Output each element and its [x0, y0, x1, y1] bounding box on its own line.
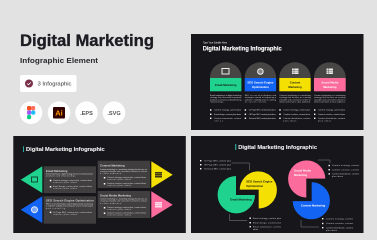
badge: 3 infographic: 3 Infographic — [38, 82, 72, 88]
column: content marketing: valuable and consistent content to — [279, 98, 312, 101]
list: content points: plan ideas — [326, 230, 337, 232]
icon: figma — [20, 101, 42, 124]
column: email marketing: Content strategy, content plan — [214, 109, 241, 112]
list: social points: plan ideas — [332, 176, 343, 178]
card: content marketing: content plan ideas — [107, 178, 131, 181]
icon: adobe illustrator — [48, 101, 70, 124]
list: social points: Content distribution, content — [332, 173, 359, 176]
list: social points: Content strategy, content — [332, 164, 359, 167]
column: social media marketing: attract and retain a clear audience. — [314, 101, 346, 104]
card: social media marketing: content plan ideas — [107, 214, 131, 216]
card: social media marketing — [98, 191, 150, 218]
icon: eps — [75, 101, 98, 124]
list: content points: Content creation, content — [326, 222, 353, 225]
list: email points: Email strategy, content plan — [253, 217, 281, 220]
column: content marketing: Content marketing is a marketing — [279, 94, 311, 97]
card: email marketing — [44, 166, 96, 193]
column: seo: Off Page SEO, content plan ideas — [249, 113, 276, 116]
column: social media marketing: Content marketing is a marketing — [314, 94, 345, 97]
pie: content marketing: Content Marketing — [301, 203, 326, 207]
card: email marketing: Email marketing is a digital strategy that uses email to promote — [46, 172, 94, 175]
list: seo points: Off Page SEO, content plan — [204, 163, 231, 166]
list: email points: Email automation, content — [253, 225, 281, 228]
column: social media marketing: Content creation, content ideas — [318, 113, 345, 116]
icon: eps: .EPS — [80, 111, 93, 117]
column: content marketing: Content creation, content ideas — [283, 113, 310, 116]
list: email points — [230, 214, 281, 231]
arrow: seo — [21, 196, 42, 223]
card: content marketing: a clear audience. — [100, 173, 122, 175]
column: seo: SEO is a set of techniques and — [245, 94, 276, 97]
card: content marketing: Content marketing is a marketing strategy that focuses on — [100, 168, 147, 171]
slide subtitle: Type Your Subtitle Here — [203, 41, 228, 44]
arrow: social media — [151, 191, 173, 218]
column: seo: strategies aimed at improving a — [245, 96, 277, 99]
column: content marketing: plan ideas — [283, 120, 296, 122]
column: email marketing — [210, 62, 242, 122]
list: seo points — [200, 159, 250, 170]
card: seo: a website's visibility and ranking on search results pages — [46, 205, 93, 208]
card: seo: SEO is a set of techniques and strategies aimed at improving — [46, 202, 93, 206]
column: email marketing: relationships. — [210, 101, 224, 104]
title: Digital Marketing — [20, 31, 154, 50]
column: seo: on search results. — [245, 101, 267, 104]
column: email marketing: ideas — [214, 120, 223, 122]
column: email marketing: Content automation, content — [214, 117, 241, 120]
pie: content marketing — [292, 182, 330, 220]
list: email points: ideas — [253, 229, 258, 231]
column: email marketing: Email marketing is a digital marketing — [210, 94, 241, 97]
slide heading: Digital Marketing Infographic — [26, 147, 105, 153]
column: social media marketing: Content distribution, content — [318, 117, 345, 120]
card: email marketing: products and relationships. — [46, 174, 76, 178]
column: social media marketing: Social Media — [321, 80, 339, 84]
card: email marketing: Content strategy, content plan, content ideas — [53, 179, 92, 182]
arrow: email marketing — [21, 166, 42, 193]
pie: social media marketing: Marketing — [294, 173, 308, 177]
card: email marketing: content plan ideas — [53, 181, 77, 184]
pie: seo: Optimization — [246, 184, 264, 188]
column: email marketing: products or services and build strong — [210, 98, 241, 101]
list: social points: Content creation, content — [332, 168, 359, 171]
card: social media marketing: creating valuable and consistent content to attract — [100, 200, 147, 203]
list: social points — [318, 160, 359, 178]
card: social media marketing: Content creation, content plan, content ideas — [107, 212, 146, 214]
column: content marketing: Content distribution, content — [283, 117, 311, 120]
slide heading: Digital Marketing Infographic — [238, 145, 317, 151]
badge: 3 infographic — [20, 75, 76, 92]
column: social media marketing: valuable and consistent content to — [314, 98, 346, 101]
column: email marketing: strategy that uses email to promote — [210, 96, 242, 99]
card: email marketing: Email design, content plan, content ideas — [53, 185, 92, 188]
card: content marketing: Content strategy, content plan, content ideas — [107, 176, 146, 179]
column: seo: Optimization — [252, 85, 269, 89]
list: content points: Content strategy, content — [326, 217, 353, 220]
list: seo points: Technical SEO, content plan — [204, 167, 231, 170]
list: content points — [301, 217, 353, 232]
pie: social media marketing: Social Media — [294, 168, 311, 172]
subtitle: Infographic Element — [20, 56, 99, 65]
column: social media marketing: strategy that focuses on creating — [314, 96, 345, 99]
card: content marketing: content plan ideas — [107, 184, 131, 187]
column: social media marketing: Marketing — [323, 85, 337, 89]
icon: svg — [103, 101, 125, 124]
card: seo: content plan ideas — [53, 213, 77, 216]
pie: email marketing: Email Marketing — [230, 198, 252, 202]
card: social media marketing: a clear audience. — [100, 203, 122, 205]
list: content points: Content distribution, content — [326, 226, 353, 229]
column: content marketing: attract and retain a clear audience. — [279, 101, 311, 104]
card: social media marketing: Content strategy, content plan, content ideas — [107, 206, 146, 209]
column: social media marketing: plan ideas — [318, 120, 331, 122]
slide heading: Digital Marketing Infographic — [203, 46, 282, 52]
column: seo: Technical SEO, content plan ideas — [249, 117, 276, 120]
card: email marketing: content plan ideas — [53, 187, 77, 190]
column: content marketing — [279, 62, 312, 122]
panel: four column slide — [191, 34, 364, 130]
column: seo: On Page SEO, content plan ideas — [249, 109, 276, 112]
column: email marketing: Email Marketing — [215, 83, 237, 87]
column: seo — [245, 62, 277, 120]
pie: email marketing — [217, 176, 255, 214]
column: social media marketing — [314, 62, 346, 122]
column: content marketing: Content — [290, 80, 300, 84]
card: content marketing: Content Marketing — [100, 164, 125, 168]
panel: pie slide — [191, 136, 364, 233]
list: seo points: On Page SEO, content plan — [204, 159, 231, 162]
card: social media marketing: Social Media Marketing — [100, 194, 131, 198]
column: email marketing: Email design, content plan ideas — [214, 113, 241, 116]
card: social media marketing: Content marketing is a marketing strategy that focuses on — [100, 198, 147, 200]
panel: arrow slide — [13, 136, 186, 233]
column: seo: website's visibility and its ranking — [245, 98, 276, 101]
card: social media marketing: content plan ideas — [107, 208, 131, 211]
card: seo: SEO Search Engine Optimization — [46, 198, 94, 202]
card: content marketing: creating valuable and consistent content to attract — [100, 170, 147, 173]
pie: seo — [239, 171, 277, 209]
column: social media marketing: Content strategy, content plan — [318, 109, 345, 112]
icon: adobe illustrator: Ai — [55, 108, 63, 117]
card: seo: On Page SEO, content plan, content ideas — [53, 211, 92, 214]
card: content marketing: Content creation, content plan, content ideas — [107, 182, 146, 185]
card: content marketing — [98, 161, 150, 188]
card: seo — [44, 196, 96, 224]
column: content marketing: strategy that focuses on creating — [279, 96, 311, 99]
column: seo: SEO Search Engine — [247, 80, 274, 84]
pie: seo: SEO Search Engine — [246, 180, 273, 184]
arrow: content marketing — [151, 161, 173, 188]
column: content marketing: Marketing — [288, 85, 302, 89]
card: seo: and visibility. — [46, 207, 66, 210]
pie: social media marketing — [288, 160, 326, 198]
icon: svg: .SVG — [107, 111, 121, 117]
list: email points: Email design, content plan — [253, 221, 281, 224]
column: content marketing: Content strategy, content plan — [283, 109, 310, 112]
card: email marketing: Email Marketing — [46, 169, 68, 173]
